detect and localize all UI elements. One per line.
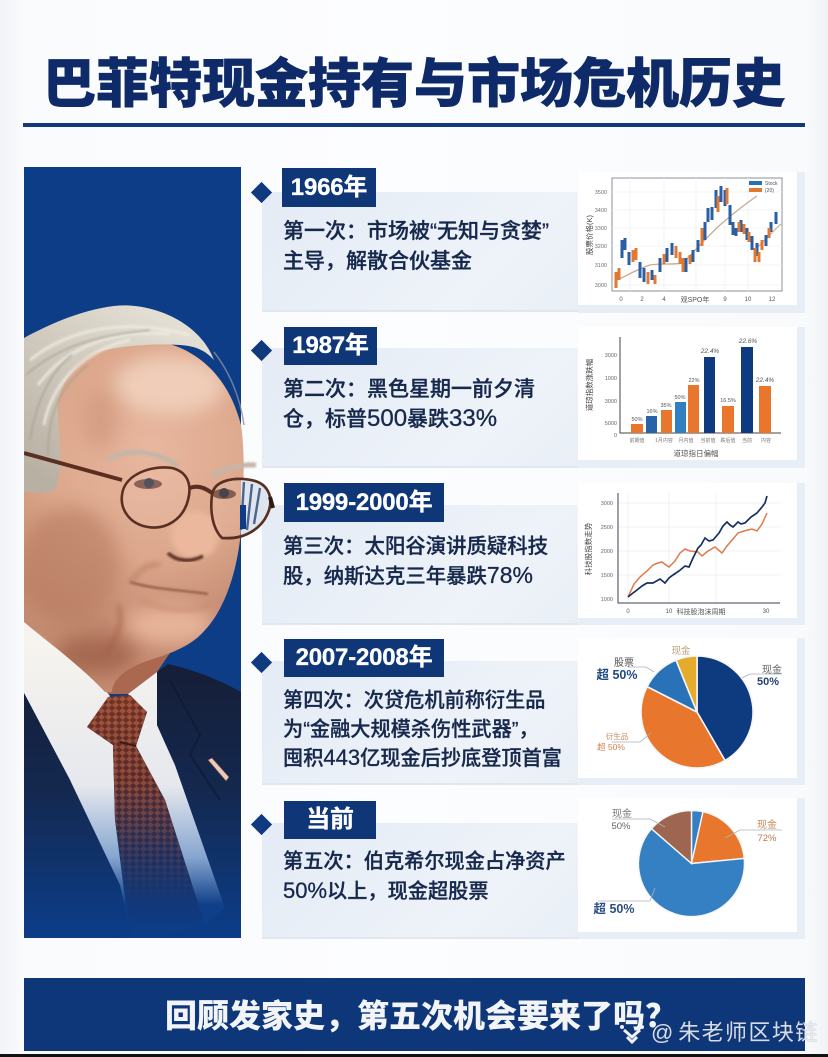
description: 第三次：太阳谷演讲质疑科技 (283, 536, 548, 558)
description (283, 220, 549, 273)
panel: 1999-2000 (262, 483, 805, 625)
bar chart: 50% (631, 417, 643, 423)
description (283, 378, 535, 432)
bar chart: 50% (674, 395, 686, 401)
eyebrows (108, 452, 256, 476)
candlestick chart: 3200 (595, 244, 607, 250)
pie chart: 72% (757, 833, 777, 844)
candlestick chart: 3500 (595, 190, 607, 196)
year badge (282, 168, 376, 207)
bar chart: 内容 (761, 437, 771, 444)
pie chart: 衍生品 (606, 731, 628, 741)
eyeglasses (24, 453, 273, 540)
text background (262, 348, 578, 468)
panel: current (251, 798, 805, 939)
candlestick chart: 10 (745, 297, 752, 303)
bar chart: 22.6% (738, 338, 757, 345)
description: 囤积443亿现金后抄底登顶首富 (283, 745, 562, 770)
bar chart: 16% (646, 409, 658, 415)
pie chart: 50% (757, 676, 779, 688)
line chart: 1000 (601, 597, 613, 603)
line chart: 2500 (601, 525, 613, 531)
icon: watermark diamond (620, 1025, 644, 1044)
hair (24, 305, 244, 493)
pie chart: 现金 (612, 807, 632, 820)
bar chart: 3000 (605, 399, 617, 405)
diamond marker (250, 181, 272, 203)
bar chart: 22.4% (755, 377, 774, 384)
line chart: 2000 (601, 549, 613, 555)
description (283, 689, 562, 770)
face (20, 340, 244, 692)
pie chart: 超 50% (596, 667, 638, 682)
candlestick chart: 9 (723, 297, 727, 303)
bar chart: 35% (660, 403, 672, 409)
neck (106, 653, 170, 694)
suit jacket (24, 664, 241, 938)
pie chart (596, 645, 782, 768)
eyes (134, 478, 236, 499)
text background (262, 192, 578, 312)
panel: 2007-2008 (251, 638, 805, 785)
pie chart: 现金 (762, 663, 782, 676)
bar chart: 3000 (605, 353, 617, 359)
bar chart: 5000 (605, 421, 617, 427)
bar chart: 月内值 (678, 437, 694, 444)
line chart: 0 (626, 609, 630, 615)
bar chart: 1月内容 (655, 437, 673, 444)
line chart (583, 493, 780, 616)
bar chart: 道琼指数涨跌幅 (584, 358, 594, 411)
pie chart: 超 50% (594, 901, 634, 916)
candlestick chart: 3100 (595, 263, 607, 269)
shirt (24, 618, 225, 925)
blue background (24, 167, 241, 938)
candlestick chart: 观SPO年 (681, 295, 709, 304)
candlestick chart: 2 (640, 297, 644, 303)
bar chart: 22.4% (700, 348, 719, 355)
candlestick chart: 3400 (595, 208, 607, 214)
bar chart: 跌后值 (720, 437, 736, 444)
description: 50%以上，现金超股票 (283, 878, 489, 903)
watermark text: @ 朱老师区块链 (651, 1020, 819, 1045)
year badge (284, 801, 376, 839)
description: 第五次：伯克希尔现金占净资产 (283, 851, 566, 873)
line chart: 3000 (601, 501, 613, 507)
watermark (620, 1020, 819, 1045)
year badge: 2007-2008年 (296, 644, 432, 671)
candlestick chart: 4 (662, 297, 666, 303)
bar chart: 前期值 (629, 437, 645, 444)
panel: portrait of Warren Buffett (24, 167, 275, 938)
title: 巴菲特现金持有与市场危机历史 (43, 55, 785, 114)
year badge (284, 639, 444, 677)
year badge (284, 327, 377, 365)
candlestick chart: 3000 (595, 283, 607, 289)
line chart: 科技股泡沫周期 (676, 607, 726, 616)
pie chart: 现金 (671, 645, 691, 657)
panel: 1966 (251, 168, 805, 313)
year badge: 1987年 (292, 332, 369, 359)
pie chart: 股票 (614, 657, 634, 669)
panel: 1987 (251, 327, 805, 468)
bar chart: 16.5% (720, 398, 736, 404)
bar chart: 当前 (742, 437, 752, 444)
description: 仓，标普500暴跌33% (283, 405, 497, 432)
candlestick chart: 0 (619, 297, 623, 303)
diamond marker (250, 339, 272, 361)
text background (262, 661, 578, 785)
pie chart: 超 50% (597, 742, 625, 752)
candlestick chart: 股票价格(K) (584, 215, 594, 255)
bar chart: 22% (688, 378, 700, 384)
lapel pin (208, 758, 229, 781)
bar chart: 当前值 (700, 437, 716, 444)
pie chart (594, 807, 782, 917)
year badge: 1999-2000年 (296, 489, 432, 516)
description: 为“金融大规模杀伤性武器”， (283, 719, 539, 741)
banner text: 回顾发家史，第五次机会要来了吗？ (165, 998, 677, 1034)
candlestick chart: 12 (769, 297, 776, 303)
candlestick chart: (20) (765, 188, 774, 194)
diamond marker (250, 813, 272, 835)
description (283, 535, 548, 588)
pie chart: 现金 (757, 818, 777, 831)
candlestick chart: Stock (765, 181, 778, 187)
description: 第二次：黑色星期一前夕清 (283, 378, 535, 401)
bar chart: 道琼指日偏幅 (674, 448, 719, 458)
diamond marker (250, 651, 272, 673)
candlestick chart (584, 178, 782, 304)
text background (262, 505, 578, 625)
description: 第一次：市场被“无知与贪婪” (283, 220, 549, 243)
bar chart: 0 (614, 433, 617, 439)
text background (262, 823, 578, 939)
line chart: 10 (666, 609, 673, 615)
description (283, 850, 566, 903)
necktie (87, 695, 201, 914)
line chart: 1500 (601, 573, 613, 579)
description: 股，纳斯达克三年暴跌78% (283, 562, 533, 588)
bar chart (584, 337, 781, 458)
pie chart: 50% (611, 821, 631, 832)
year badge: 1966年 (291, 174, 367, 201)
line chart: 30 (763, 609, 770, 615)
year badge (284, 483, 444, 522)
bar chart: 1000 (605, 376, 617, 382)
description: 主导，解散合伙基金 (283, 250, 472, 273)
candlestick chart: 3300 (595, 226, 607, 232)
year badge: 当前 (306, 806, 354, 833)
description: 第四次：次贷危机前称衍生品 (283, 690, 545, 712)
line chart: 科技股指数走势 (583, 522, 593, 575)
bottom banner (24, 978, 805, 1051)
